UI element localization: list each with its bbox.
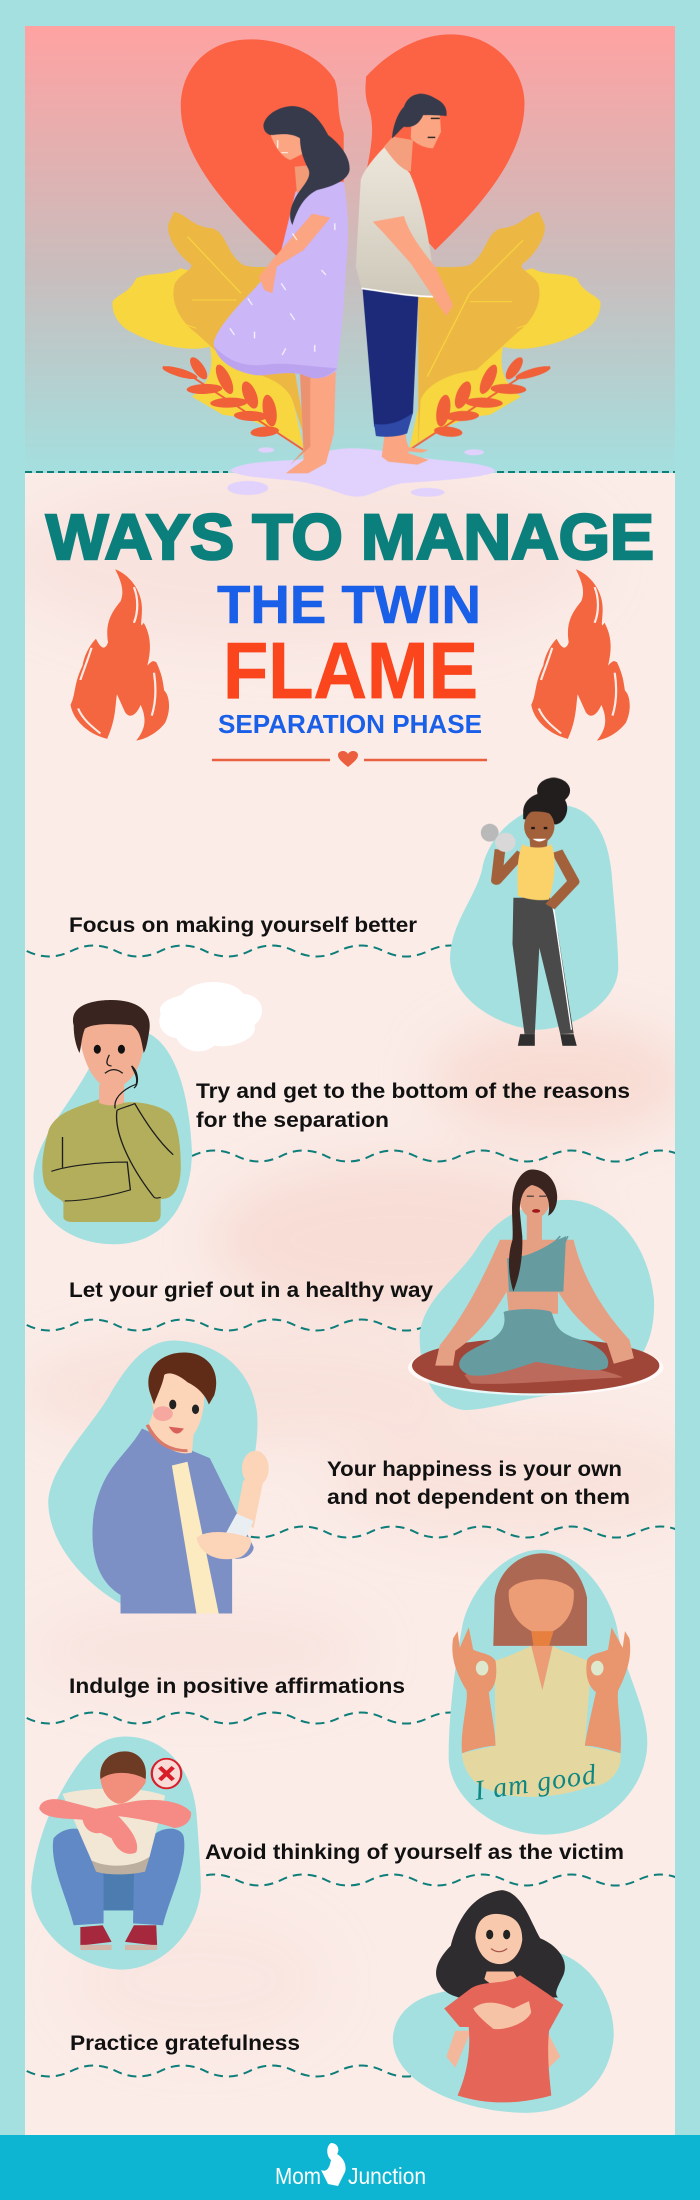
tip 4: Your happiness is your own: [327, 1458, 622, 1481]
hero dashed divider: [25, 471, 675, 473]
tip 4: and not dependent on them: [327, 1486, 630, 1509]
tip 5: Indulge in positive affirmations: [69, 1675, 405, 1698]
left foliage: [112, 212, 308, 450]
tip 2: [196, 1080, 630, 1132]
icon: left flame: [71, 569, 169, 741]
tip 1: Focus on making yourself better: [69, 914, 417, 937]
heading line: the twin: THE TWIN: [217, 575, 481, 635]
heading line: ways to manage: WAYS TO MANAGE: [46, 501, 654, 573]
figure: crouching man with X icon: [31, 1737, 201, 1970]
tip 2: Try and get to the bottom of the reasons: [196, 1080, 630, 1103]
broken heart left half: [181, 39, 344, 258]
figure: smiling man with phone: [48, 1340, 269, 1614]
heading line: flame: FLAME: [223, 626, 478, 715]
broken heart right half: [365, 34, 525, 250]
right foliage: [409, 212, 600, 450]
figure: woman with dumbbell: [450, 778, 618, 1046]
cream textured content panel: [0, 470, 700, 2138]
icon: right flame: [531, 569, 630, 741]
tip 2: for the separation: [196, 1109, 389, 1132]
figure: meditating woman on mat: [408, 1170, 663, 1410]
tip 7: Practice gratefulness: [70, 2032, 300, 2055]
icon: red X badge: [152, 1759, 181, 1788]
tip 4: [327, 1458, 630, 1509]
tip 3: Let your grief out in a healthy way: [69, 1279, 433, 1302]
woman in lilac dress: [214, 106, 350, 473]
purple puddle: [227, 447, 496, 497]
handwritten label: I am good: I am good: [472, 1759, 599, 1807]
figure: thoughtful man with cloud: [33, 982, 262, 1244]
wavy dashed dividers: [27, 946, 683, 2076]
footer bar with logo: [0, 2135, 700, 2200]
figure: grateful woman hands on chest: [393, 1890, 614, 2113]
hero illustration: separated couple before broken heart: [112, 34, 600, 497]
logo wordmark: Junction: Junction: [348, 2163, 426, 2189]
logo wordmark: Mom: Mom: [275, 2163, 321, 2189]
tip 6: Avoid thinking of yourself as the victim: [205, 1841, 624, 1864]
man in tee and jeans: [356, 94, 453, 465]
heart divider: [212, 751, 487, 767]
tip labels: [69, 914, 630, 2055]
hero background panel: [25, 26, 675, 473]
figure: woman with OK hands: [449, 1550, 647, 1835]
heading line: separation phase: SEPARATION PHASE: [218, 709, 482, 739]
title: [46, 501, 654, 739]
logo icon: mother and child: [321, 2143, 346, 2186]
thought cloud: [159, 982, 262, 1052]
